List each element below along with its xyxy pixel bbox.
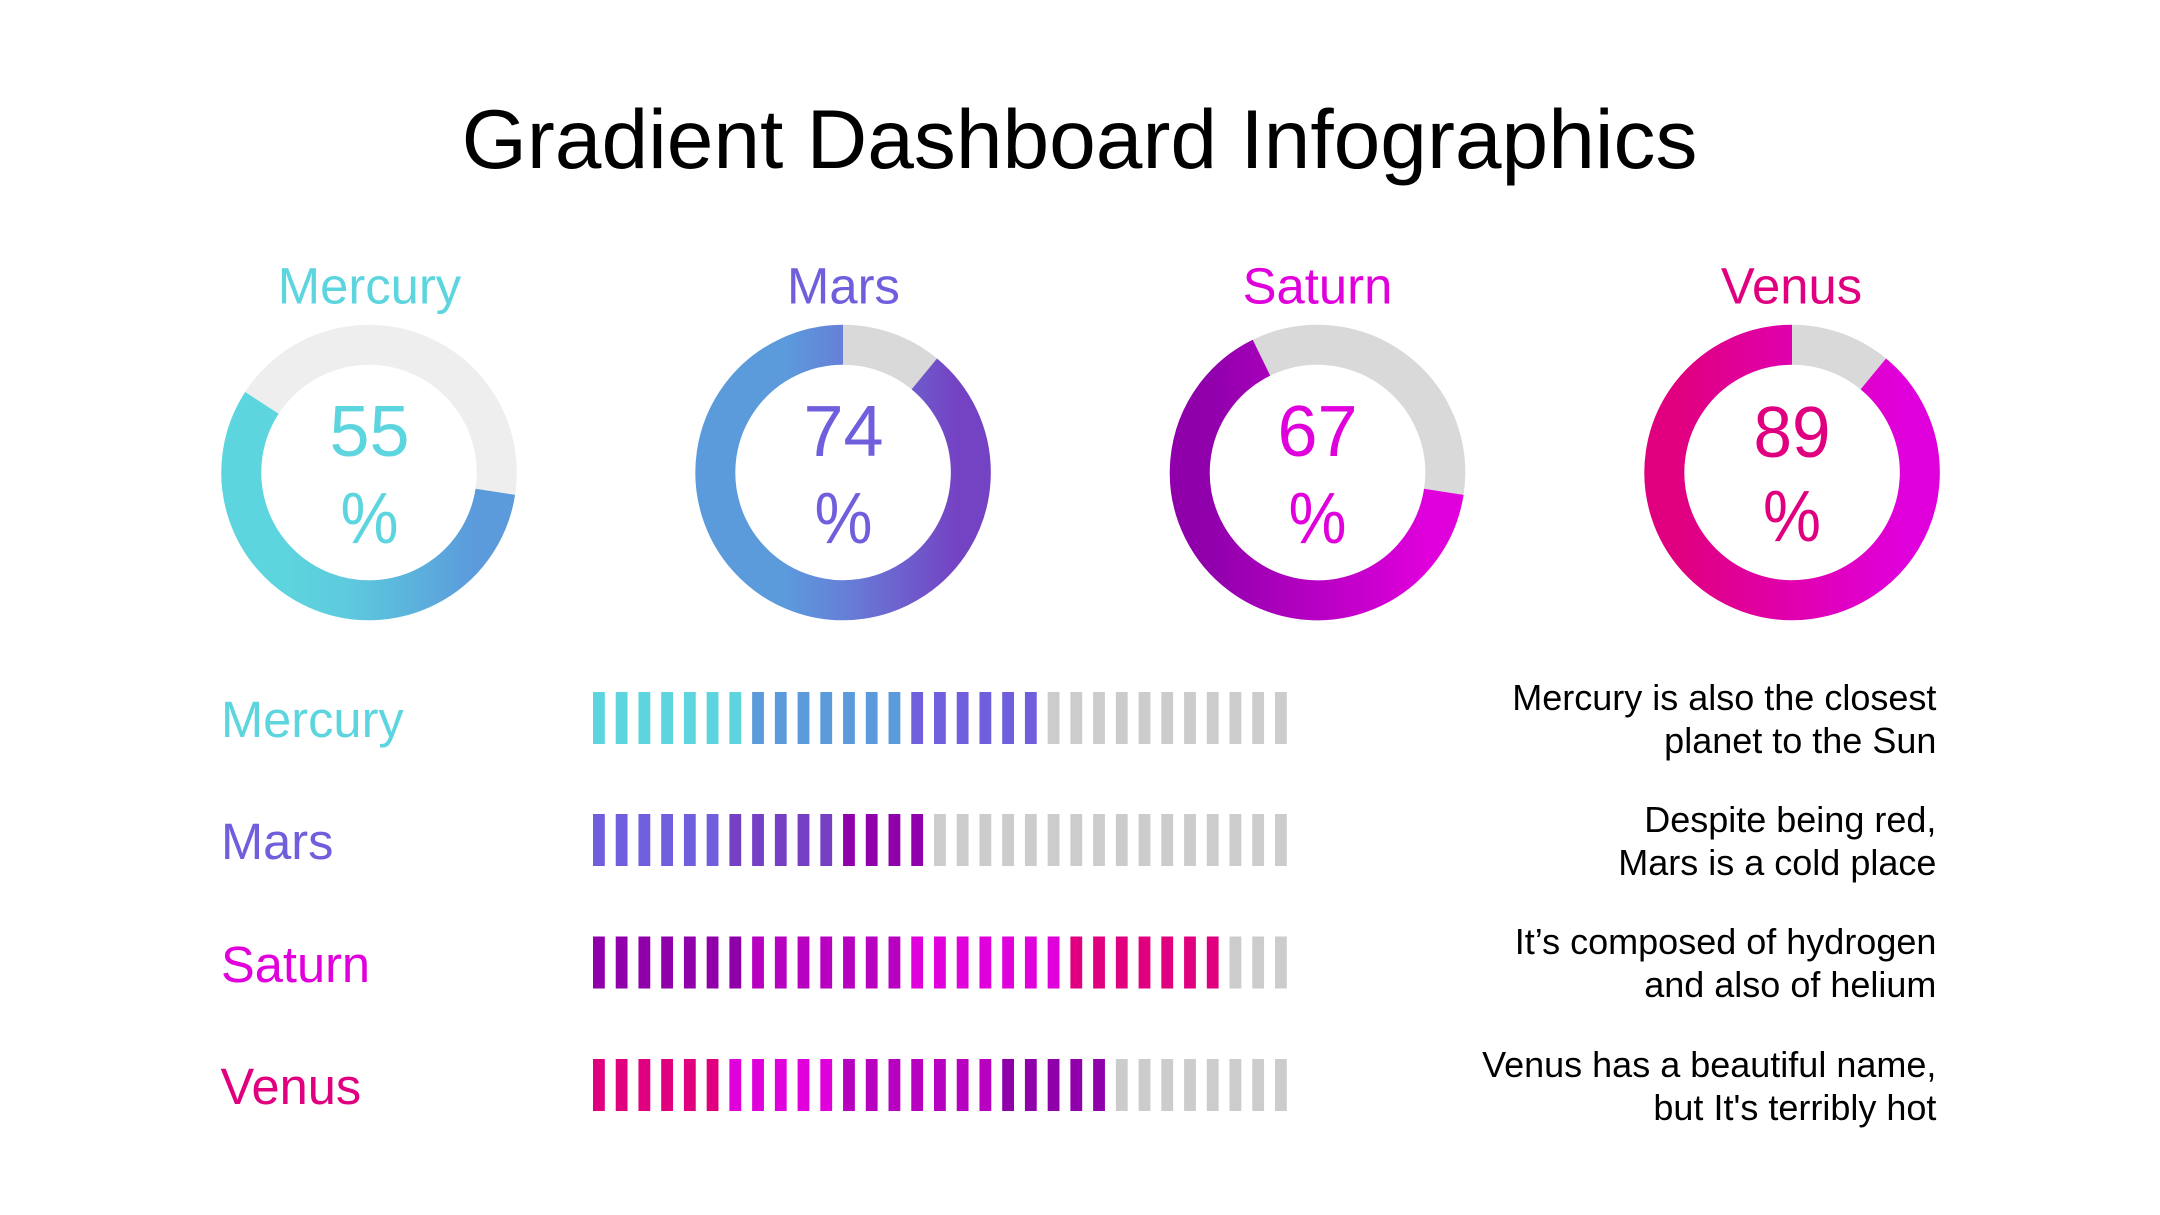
value: 55%: 55	[329, 392, 410, 472]
value: 55%: %	[340, 479, 398, 559]
panel: Mars donut	[715, 258, 971, 600]
description: Mars: Mars is a cold place	[1618, 842, 1936, 883]
donut chart: Mars 74%	[715, 345, 971, 600]
heading: Mercury: Mercury	[278, 258, 462, 314]
value: 67%: 67	[1277, 392, 1358, 472]
value: 67%	[1277, 392, 1358, 559]
value: 55%	[329, 392, 410, 559]
description: Venus: but It's terribly hot	[1653, 1087, 1936, 1128]
row label: Mercury: Mercury	[221, 691, 404, 748]
value: 89%	[1754, 393, 1830, 557]
panel: Saturn donut	[1190, 258, 1445, 600]
value: 74%: 74	[803, 392, 884, 472]
segmented bar: Saturn	[593, 936, 1287, 988]
segmented bar: Mercury	[593, 692, 1287, 744]
description: Mars	[1618, 799, 1936, 883]
panel: Venus donut	[1664, 258, 1920, 600]
value: 89%: %	[1763, 477, 1821, 557]
description: Mercury: planet to the Sun	[1664, 720, 1936, 761]
segmented bar: Mars	[593, 814, 1287, 866]
donut chart: Saturn 67%	[1190, 345, 1445, 600]
row label: Mars: Mars	[221, 813, 333, 870]
row label: Saturn: Saturn	[221, 936, 370, 993]
description: Venus: Venus has a beautiful name,	[1482, 1044, 1936, 1085]
panel: Mercury donut	[241, 258, 497, 600]
description: Mercury	[1512, 677, 1936, 761]
description: Saturn: It’s composed of hydrogen	[1515, 921, 1936, 962]
value: 67%: %	[1288, 479, 1346, 559]
description: Mercury: Mercury is also the closest	[1512, 677, 1936, 718]
donut chart: Mercury 55%	[241, 345, 497, 600]
description: Venus	[1482, 1044, 1936, 1128]
value: 74%	[803, 392, 884, 559]
donut chart: Venus 89%	[1664, 345, 1920, 600]
description: Saturn	[1515, 921, 1936, 1005]
heading: Saturn: Saturn	[1243, 258, 1392, 314]
row label: Venus: Venus	[220, 1058, 361, 1115]
value: 74%: %	[814, 479, 872, 559]
heading: Venus: Venus	[1721, 258, 1862, 314]
heading: Mars: Mars	[787, 258, 900, 314]
segmented bar: Venus	[593, 1059, 1287, 1111]
description: Mars: Despite being red,	[1644, 799, 1936, 840]
title: Gradient Dashboard Infographics	[462, 92, 1697, 186]
description: Saturn: and also of helium	[1644, 964, 1936, 1005]
value: 89%: 89	[1754, 393, 1830, 473]
